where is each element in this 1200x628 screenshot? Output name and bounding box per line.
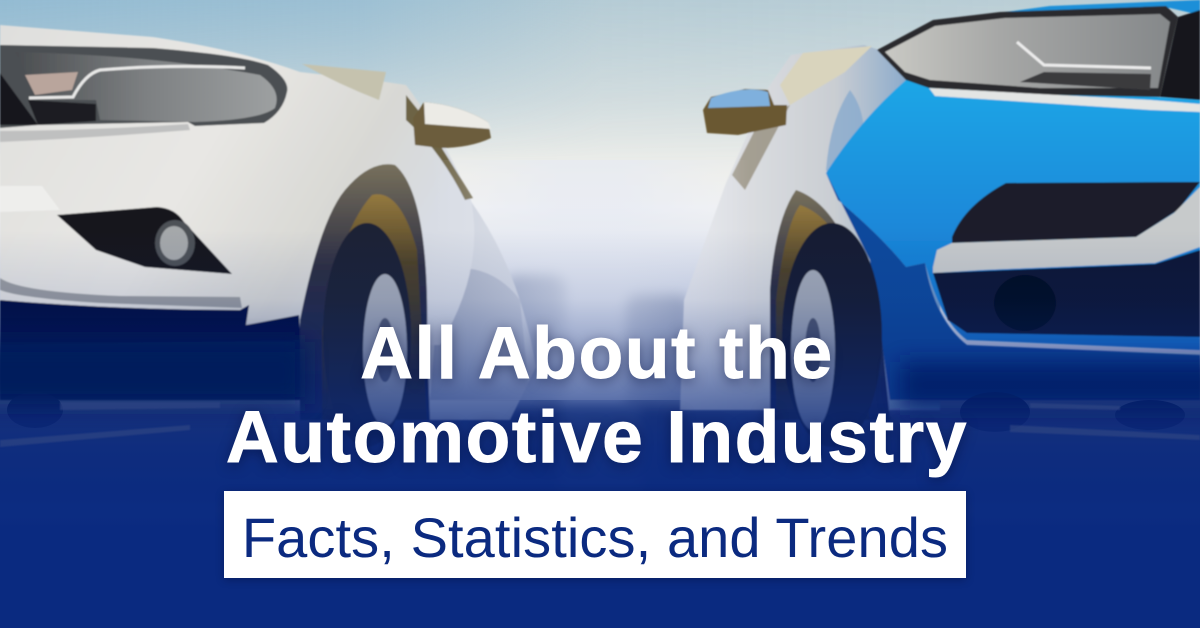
white car [0, 25, 536, 447]
ground [0, 405, 1200, 505]
center haze [430, 160, 750, 400]
body [0, 25, 474, 345]
hood shoulder [780, 46, 872, 105]
wheel arch [770, 190, 890, 420]
side window strip [406, 95, 473, 200]
fog lamp [155, 220, 195, 266]
blue strip above headlight [930, 0, 1200, 30]
silver far side fading out [380, 90, 536, 420]
windshield base [302, 64, 386, 100]
rim [363, 274, 407, 426]
darker navy corners [0, 342, 305, 404]
title line 1: All About the [360, 313, 834, 394]
rim [791, 270, 835, 430]
mirror [413, 102, 491, 148]
blue car [680, 0, 1200, 447]
far wheels right [960, 392, 1185, 432]
tire [782, 223, 882, 447]
chrome lower trim [933, 187, 1200, 273]
title line 2: Automotive Industry [226, 397, 968, 478]
fog lamp [994, 275, 1056, 331]
grille recess [952, 182, 1200, 243]
lower dark grille and bumper [0, 300, 305, 400]
blue panel [826, 80, 1200, 350]
distant cars [505, 275, 690, 410]
lower intake [933, 250, 1200, 337]
chrome strip [929, 88, 1200, 112]
right black trim [1160, 10, 1200, 100]
subtitle box: Facts, Statistics, and Trends [242, 506, 948, 569]
subtitle box [224, 491, 966, 578]
wheel arch [300, 164, 430, 420]
far wheel left [7, 392, 63, 428]
headlight [0, 45, 287, 128]
headlight [877, 6, 1178, 97]
tire [323, 223, 411, 447]
fog lamp recess [57, 207, 232, 274]
mirror [703, 89, 787, 135]
navy gradient overlay [0, 230, 1200, 530]
ground reflections [0, 402, 1200, 447]
background scene: two cars in a parking lot [0, 0, 1200, 448]
silver side fading out [680, 45, 940, 410]
